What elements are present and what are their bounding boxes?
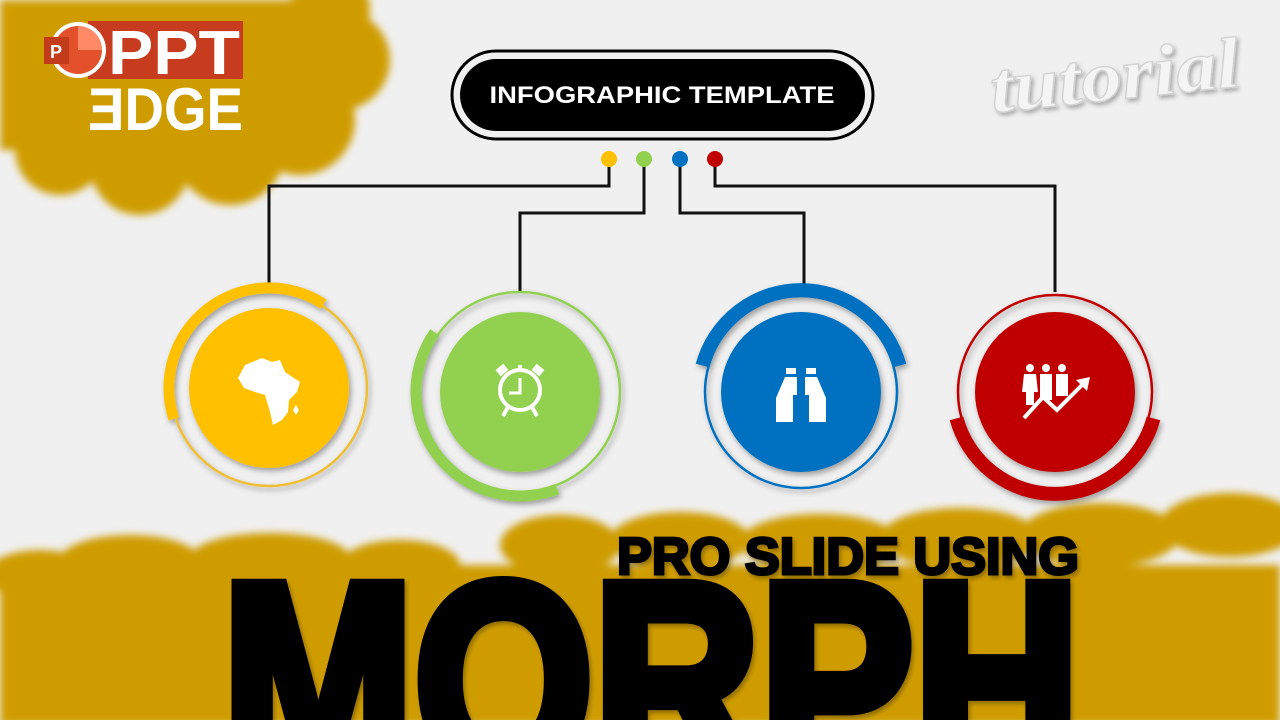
- logo: PPT EDGE: PPT: [108, 19, 240, 88]
- tutorial watermark: tutorial: [986, 23, 1243, 128]
- icon: africa: [238, 358, 300, 425]
- logo: PPT EDGE: [44, 19, 243, 143]
- subtitle: PRO SLIDE USING: PRO SLIDE USING: [617, 528, 1079, 586]
- logo: PPT EDGE: P: [50, 42, 62, 62]
- logo: PPT EDGE: ƎDGE: [88, 76, 243, 143]
- icon: binoculars: [776, 368, 826, 422]
- circle 2: green clock: [416, 292, 620, 496]
- background blob: top-left cloud: [0, 0, 390, 215]
- icon: alarm clock: [500, 365, 540, 416]
- connector lines: [269, 159, 1055, 292]
- dots: [601, 151, 723, 167]
- title pill: [452, 51, 873, 139]
- circle 1: yellow africa: [169, 288, 367, 486]
- title pill: INFOGRAPHIC TEMPLATE: [490, 82, 834, 109]
- circle 4: red growth: [956, 295, 1154, 494]
- background blob: bottom band: [0, 493, 1280, 720]
- circle 3: blue binoculars: [702, 290, 900, 488]
- icon: people with rising arrow: [1022, 364, 1090, 418]
